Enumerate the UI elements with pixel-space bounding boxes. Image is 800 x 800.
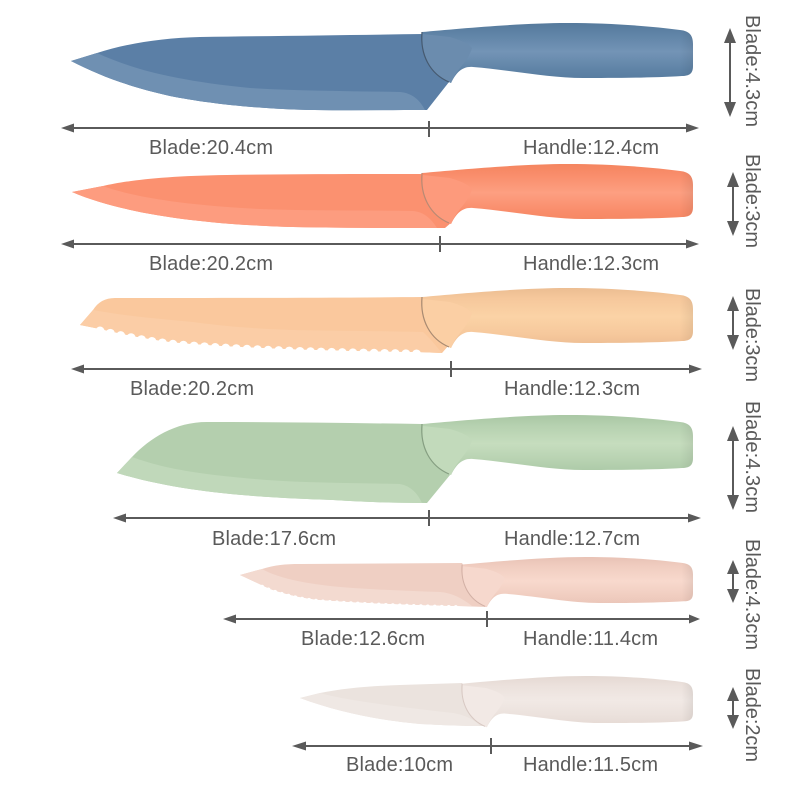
- blade 6: [300, 683, 487, 726]
- knife 6: off-white paring knife: [300, 676, 693, 727]
- handle 3: [422, 288, 693, 348]
- dimension row 4: [113, 401, 763, 550]
- label: blade length 5: Blade:12.6cm: [301, 628, 425, 650]
- handle 2: [422, 164, 693, 224]
- knife 2: orange slicing knife: [72, 164, 693, 228]
- blade 3 bevel: [80, 310, 442, 353]
- dimension row 2: [61, 154, 763, 275]
- label: blade length 4: Blade:17.6cm: [212, 528, 336, 550]
- knife 1: blue chef knife: [71, 23, 693, 110]
- label: blade length 1: Blade:20.4cm: [149, 137, 273, 159]
- label: blade width 4: Blade:4.3cm: [741, 401, 763, 513]
- label: handle length 4: Handle:12.7cm: [504, 528, 640, 550]
- handle 4: [422, 415, 693, 475]
- blade 3 serrations: [100, 331, 420, 354]
- label: handle length 6: Handle:11.5cm: [523, 754, 658, 776]
- label: blade length 3: Blade:20.2cm: [130, 378, 254, 400]
- label: handle length 5: Handle:11.4cm: [523, 628, 658, 650]
- label: handle length 2: Handle:12.3cm: [523, 253, 659, 275]
- blade 4 bevel: [117, 457, 422, 503]
- dimension row 1: [61, 15, 763, 159]
- blade 5 serrations: [262, 587, 460, 608]
- blade 5: [240, 563, 487, 607]
- label: blade width 3: Blade:3cm: [741, 288, 763, 382]
- blade 6 bevel: [300, 693, 480, 726]
- handle 6: [462, 676, 693, 727]
- blade 4: [117, 422, 450, 503]
- blade 3: [80, 297, 449, 353]
- label: blade width 5: Blade:4.3cm: [741, 539, 763, 650]
- label: blade width 1: Blade:4.3cm: [741, 15, 763, 127]
- label: blade length 2: Blade:20.2cm: [149, 253, 273, 275]
- dimension row 6: [292, 668, 763, 776]
- handle 5: [462, 557, 693, 607]
- knife 3: peach bread knife: [80, 288, 693, 354]
- blade 2: [72, 174, 452, 228]
- blade 1: [71, 34, 449, 110]
- dimension row 3: [71, 288, 763, 400]
- label: blade width 2: Blade:3cm: [741, 154, 763, 248]
- knife 4: green santoku knife: [117, 415, 693, 503]
- label: handle length 1: Handle:12.4cm: [523, 137, 659, 159]
- blade 2 bevel: [72, 186, 437, 228]
- label: handle length 3: Handle:12.3cm: [504, 378, 640, 400]
- label: blade width 6: Blade:2cm: [741, 668, 763, 762]
- blade 1 bevel: [71, 53, 425, 110]
- handle 1: [422, 23, 693, 83]
- knife 5: pink serrated utility knife: [240, 557, 693, 608]
- label: blade length 6: Blade:10cm: [346, 754, 453, 776]
- blade 5 bevel: [240, 569, 472, 606]
- dimension row 5: [223, 539, 763, 650]
